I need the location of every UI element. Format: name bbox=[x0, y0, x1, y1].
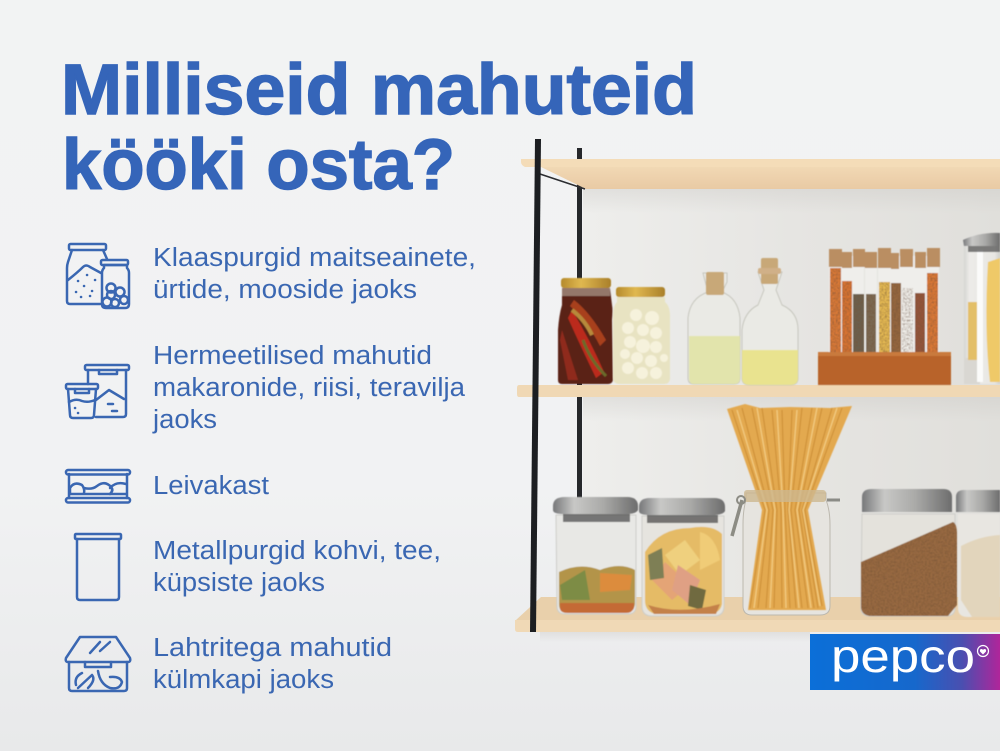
jar with peppers bbox=[558, 278, 613, 384]
title: kööki osta? bbox=[62, 126, 455, 205]
icon: compartment container bbox=[66, 637, 130, 691]
shelf photo bbox=[515, 139, 1000, 642]
middle shelf bbox=[517, 385, 1000, 397]
list item 4: metal jars bbox=[75, 534, 441, 600]
oil bottle tall bbox=[742, 258, 798, 385]
label: compartment containers bbox=[153, 634, 392, 694]
top shelf bbox=[521, 159, 1000, 189]
label: airtight containers: Hermeetilised mahutid bbox=[153, 342, 432, 370]
back post bbox=[577, 148, 582, 498]
jar body bbox=[743, 493, 830, 615]
glass jar with fusilli bbox=[553, 497, 638, 614]
list item 2: airtight containers bbox=[66, 342, 466, 434]
label: compartment containers: Lahtritega mahutid bbox=[153, 634, 392, 662]
title bbox=[61, 51, 697, 205]
title: Milliseid mahuteid bbox=[61, 51, 697, 130]
label: metal jars: Metallpurgid kohvi, tee, bbox=[153, 537, 441, 565]
jar with pearl onions bbox=[613, 287, 670, 384]
icon: airtight containers bbox=[66, 365, 129, 418]
logo: pepco bbox=[810, 630, 1000, 690]
glass jar with farfalle bbox=[639, 498, 725, 616]
icon: metal jar bbox=[75, 534, 121, 600]
spaghetti bundle bbox=[727, 404, 852, 610]
list item 5: compartment containers bbox=[66, 634, 392, 694]
glass jar with rice bbox=[956, 490, 1000, 617]
glass jar at right edge bbox=[963, 233, 1000, 384]
logo: pepco: pepco bbox=[831, 630, 975, 682]
icon: heart badge bbox=[978, 646, 988, 656]
oil bottle small bbox=[688, 272, 740, 384]
list item 3: bread box bbox=[66, 470, 269, 502]
label: compartment containers: külmkapi jaoks bbox=[153, 666, 334, 694]
glass jar with buckwheat bbox=[861, 489, 957, 616]
front post bbox=[530, 139, 541, 632]
jar neck and clip bbox=[744, 490, 826, 502]
label: glass jars bbox=[153, 244, 476, 304]
wall between shelves bbox=[540, 185, 1000, 642]
label: airtight containers: jaoks bbox=[152, 406, 217, 434]
icon: glass jars bbox=[67, 244, 129, 308]
label: metal jars bbox=[153, 537, 441, 597]
icon: bread box bbox=[66, 470, 130, 502]
spice test tubes in wood block bbox=[818, 248, 951, 385]
label: glass jars: Klaaspurgid maitseainete, bbox=[153, 244, 476, 272]
list item 1: glass jars bbox=[67, 244, 476, 308]
label: airtight containers: makaronide, riisi, teravilja bbox=[153, 374, 466, 402]
glass jar with spaghetti bbox=[727, 404, 852, 615]
label: metal jars: küpsiste jaoks bbox=[153, 569, 325, 597]
label: bread box: Leivakast bbox=[153, 472, 269, 500]
label: airtight containers bbox=[152, 342, 466, 434]
label: glass jars: ürtide, mooside jaoks bbox=[153, 276, 417, 304]
bottom shelf bbox=[515, 597, 1000, 632]
